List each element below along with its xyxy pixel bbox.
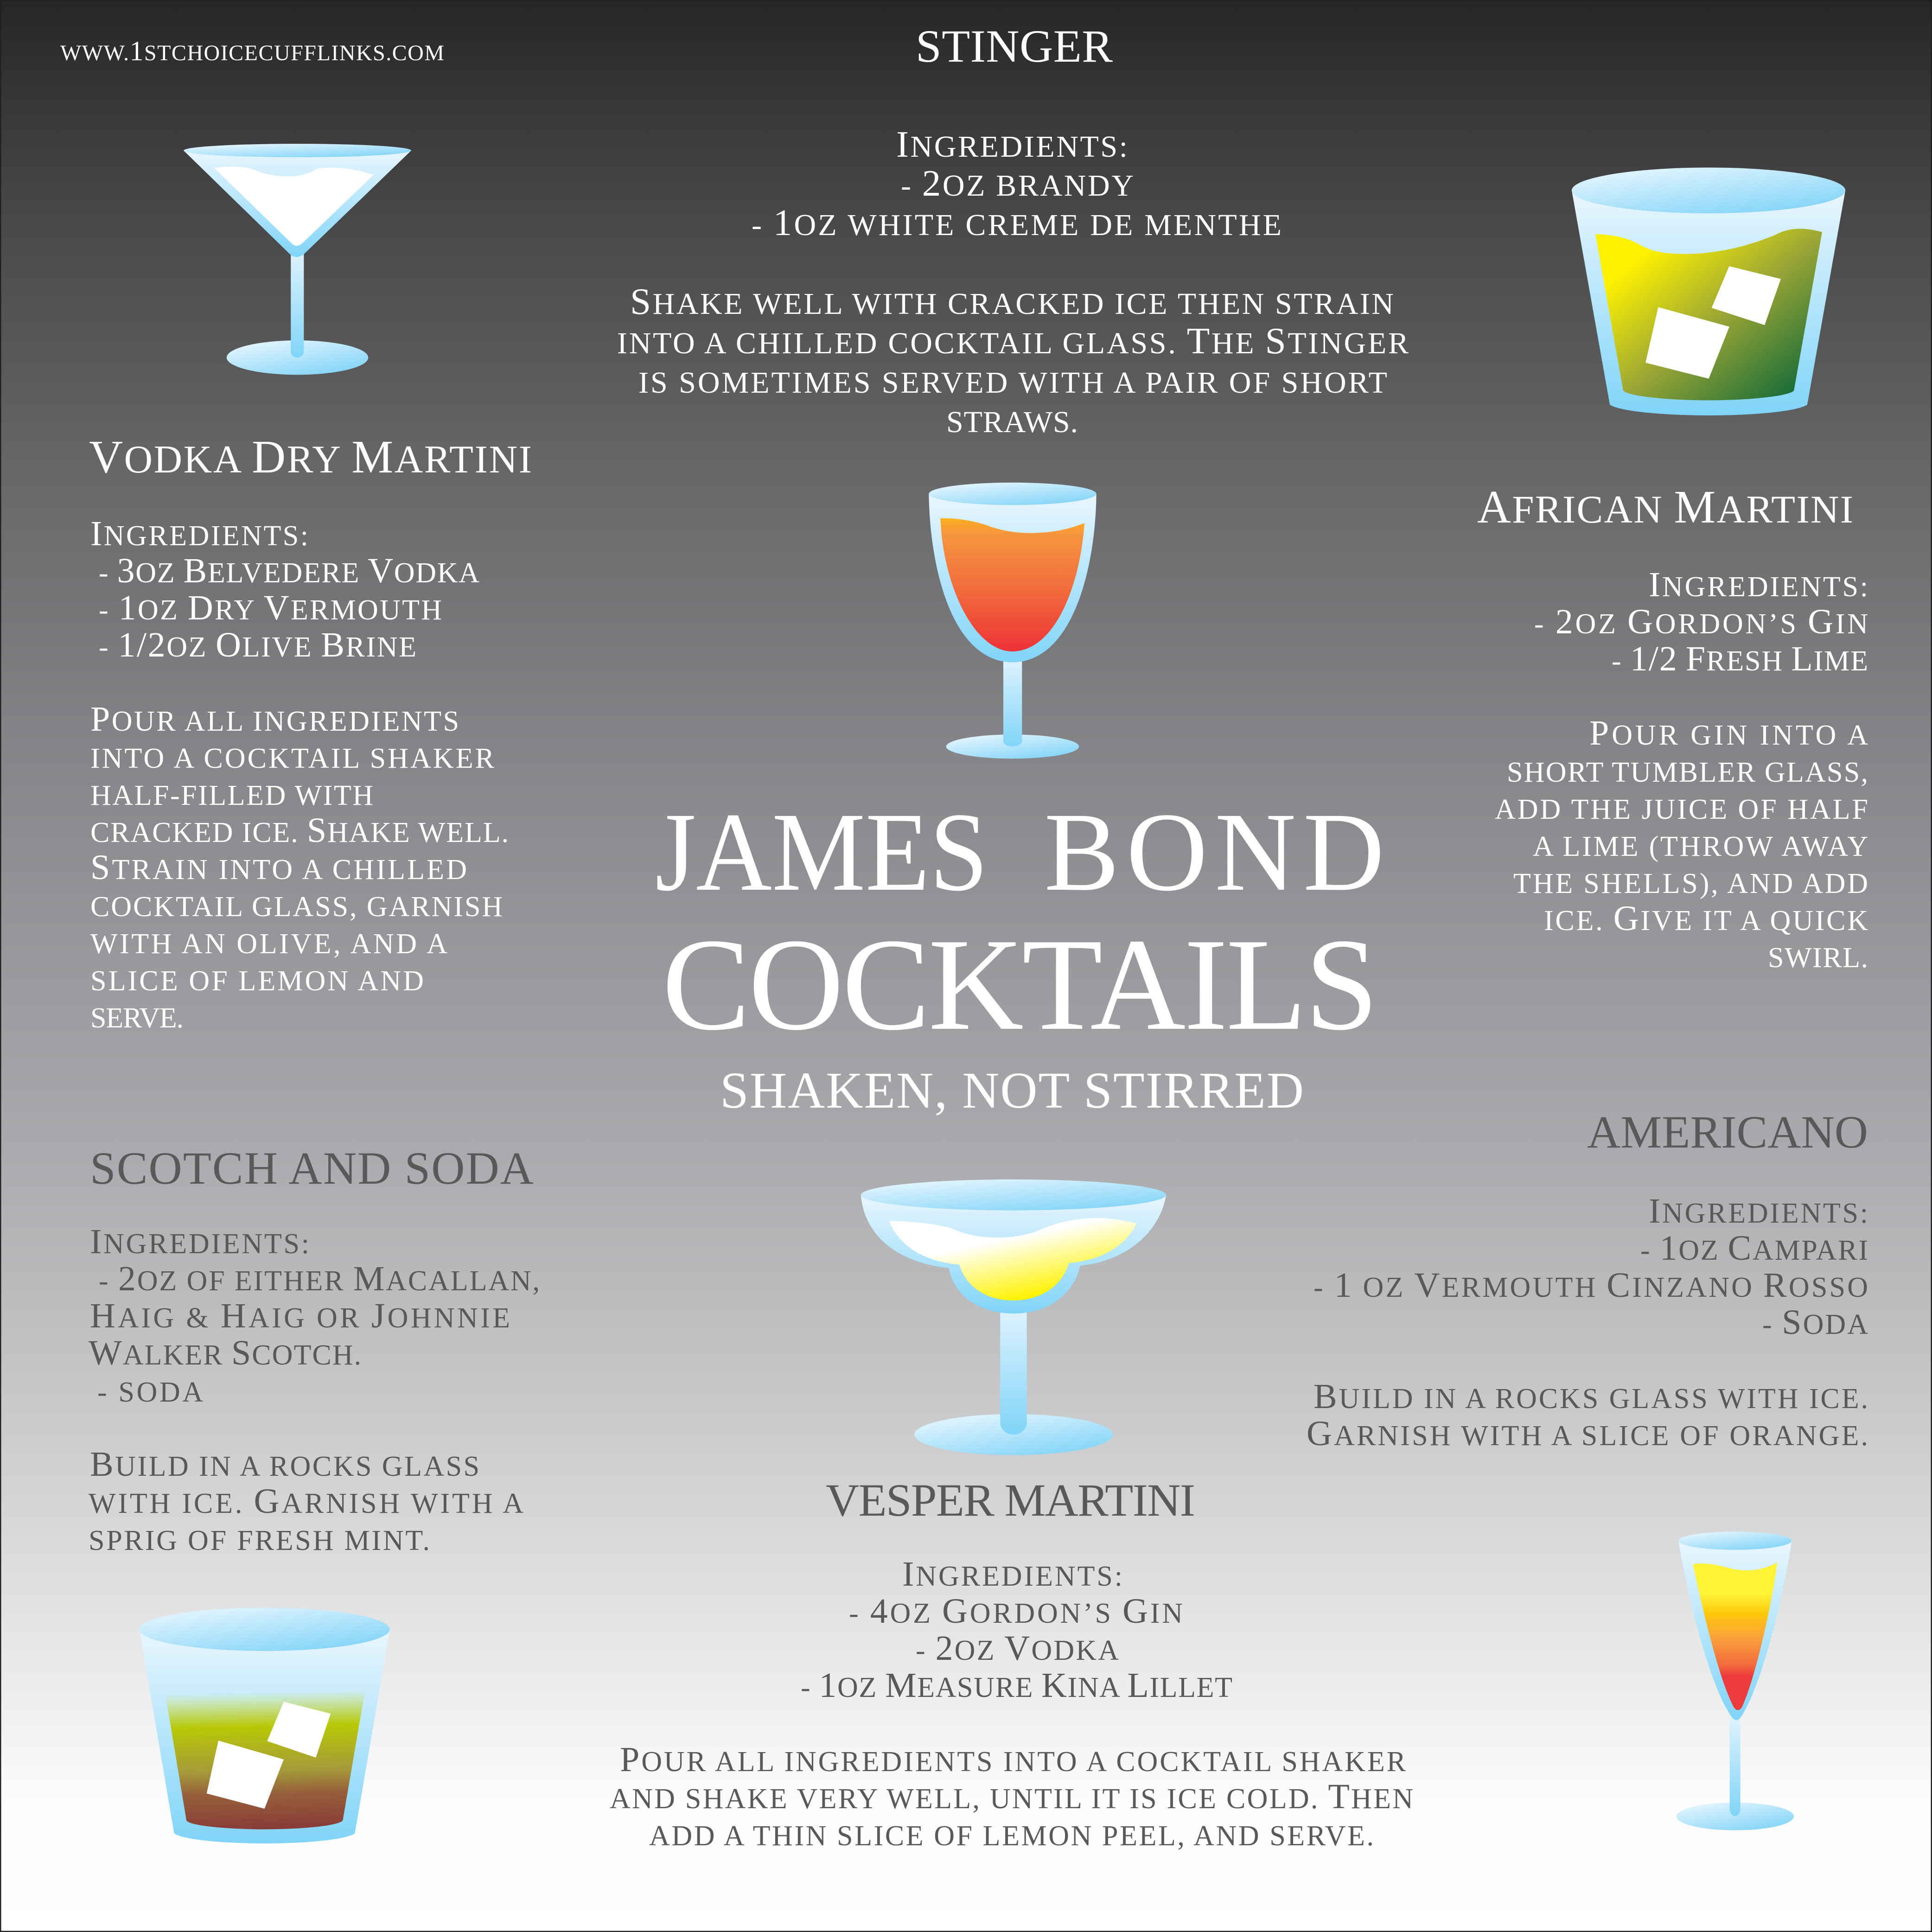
recipe: stinger: INTO A CHILLED COCKTAIL GLASS. THE STINGER <box>617 320 1409 362</box>
recipe: vodka dry martini: INTO A COCKTAIL SHAKER <box>90 743 495 774</box>
recipe: scotch and soda: HAIG & HAIG OR JOHNNIE <box>90 1296 510 1335</box>
recipe: americano: AMERICANO <box>1587 1106 1868 1158</box>
recipe: african martini: POUR GIN INTO A <box>1589 714 1868 752</box>
recipe: vodka dry martini: HALF-FILLED WITH <box>90 780 373 811</box>
recipe: vesper martini: VESPER MARTINI <box>826 1474 1195 1526</box>
title <box>655 789 1384 1119</box>
title: SHAKEN, NOT STIRRED <box>720 1062 1304 1119</box>
recipe: stinger: STRAWS. <box>946 405 1078 439</box>
recipe: vesper martini: INGREDIENTS: <box>902 1555 1122 1594</box>
recipe: african martini <box>1477 481 1868 974</box>
recipe: african martini: - 2OZ GORDON’S GIN <box>1534 602 1868 641</box>
recipe: vesper martini: AND SHAKE VERY WELL, UNTIL IT IS ICE COLD. THEN <box>610 1777 1413 1816</box>
recipe: stinger: SHAKE WELL WITH CRACKED ICE THEN STRAIN <box>630 281 1394 322</box>
recipe: scotch and soda: SCOTCH AND SODA <box>90 1142 534 1194</box>
recipe: vodka dry martini: - 3OZ BELVEDERE VODKA <box>99 551 479 590</box>
recipe: african martini: THE SHELLS), AND ADD <box>1513 868 1868 899</box>
recipe: vodka dry martini: INGREDIENTS: <box>90 514 308 553</box>
recipe: vesper martini: ADD A THIN SLICE OF LEMON PEEL, AND SERVE. <box>649 1820 1374 1852</box>
recipe: african martini: - 1/2 FRESH LIME <box>1612 639 1868 678</box>
recipe: african martini: SWIRL. <box>1768 942 1868 974</box>
recipe: vodka dry martini: POUR ALL INGREDIENTS <box>90 700 459 739</box>
recipe: scotch and soda: - SODA <box>97 1377 203 1408</box>
recipe: scotch and soda: WITH ICE. GARNISH WITH A <box>89 1482 523 1521</box>
icon: stinger glass <box>929 483 1097 759</box>
recipe: vodka dry martini: - 1/2OZ OLIVE BRINE <box>99 625 416 664</box>
recipe: scotch and soda: INGREDIENTS: <box>90 1222 309 1261</box>
recipe: african martini: A LIME (THROW AWAY <box>1533 831 1868 862</box>
recipe: african martini: ICE. GIVE IT A QUICK <box>1544 899 1868 938</box>
recipe: african martini: INGREDIENTS: <box>1649 565 1868 604</box>
recipe: americano <box>1307 1106 1868 1453</box>
recipe: african martini: SHORT TUMBLER GLASS, <box>1507 757 1868 788</box>
recipe: americano: - 1 OZ VERMOUTH CINZANO ROSSO <box>1314 1266 1868 1305</box>
recipe: americano: GARNISH WITH A SLICE OF ORANGE. <box>1307 1414 1868 1453</box>
recipe: scotch and soda: WALKER SCOTCH. <box>89 1333 361 1372</box>
recipe: vesper martini: POUR ALL INGREDIENTS INTO A COCKTAIL SHAKER <box>620 1740 1406 1779</box>
recipe: vesper martini: - 4OZ GORDON’S GIN <box>849 1592 1183 1631</box>
recipe: americano: INGREDIENTS: <box>1649 1192 1868 1231</box>
recipe: vodka dry martini: - 1OZ DRY VERMOUTH <box>99 588 442 627</box>
recipe: scotch and soda <box>89 1142 540 1556</box>
icon: vodka dry martini glass <box>184 144 411 375</box>
recipe: stinger: INGREDIENTS: <box>896 123 1128 165</box>
recipe: vodka dry martini: SERVE. <box>90 1002 184 1034</box>
recipe: scotch and soda: - 2OZ OF EITHER MACALLAN, <box>99 1259 540 1298</box>
icon: americano glass <box>1677 1531 1794 1830</box>
icon: vesper martini glass <box>861 1180 1166 1455</box>
icon: scotch and soda glass <box>139 1608 390 1843</box>
recipe: vodka dry martini: WITH AN OLIVE, AND A <box>90 928 447 960</box>
recipe: scotch and soda: SPRIG OF FRESH MINT. <box>89 1525 430 1556</box>
recipe: vodka dry martini <box>89 431 532 1034</box>
recipe: americano: - 1OZ CAMPARI <box>1640 1229 1868 1268</box>
title: JAMES <box>655 789 988 914</box>
recipe: vesper martini <box>610 1474 1413 1852</box>
icon: african martini glass <box>1572 167 1845 415</box>
recipe: stinger: - 2OZ BRANDY <box>901 162 1134 204</box>
recipe: vodka dry martini: CRACKED ICE. SHAKE WELL. <box>90 811 509 850</box>
recipe: vesper martini: - 1OZ MEASURE KINA LILLET <box>801 1666 1232 1705</box>
recipe: vodka dry martini: COCKTAIL GLASS, GARNISH <box>90 891 503 923</box>
recipe: scotch and soda: BUILD IN A ROCKS GLASS <box>90 1445 479 1484</box>
recipe: stinger: IS SOMETIMES SERVED WITH A PAIR OF SHORT <box>638 366 1387 400</box>
recipe: vodka dry martini: STRAIN INTO A CHILLED <box>90 848 467 887</box>
recipe: vesper martini: - 2OZ VODKA <box>916 1629 1119 1668</box>
recipe: americano: BUILD IN A ROCKS GLASS WITH ICE. <box>1314 1377 1868 1416</box>
recipe: stinger: - 1OZ WHITE CREME DE MENTHE <box>752 202 1282 243</box>
recipe: vodka dry martini: SLICE OF LEMON AND <box>90 965 424 997</box>
recipe: stinger: STINGER <box>916 20 1113 72</box>
title: COCKTAILS <box>662 911 1378 1058</box>
recipe: african martini: ADD THE JUICE OF HALF <box>1495 794 1868 825</box>
title: BOND <box>1044 789 1384 914</box>
recipe: americano: - SODA <box>1762 1303 1868 1342</box>
website url: WWW.1STCHOICECUFFLINKS.COM <box>60 36 444 66</box>
recipe: african martini: AFRICAN MARTINI <box>1477 481 1853 533</box>
recipe: vodka dry martini: VODKA DRY MARTINI <box>89 431 532 483</box>
recipe: stinger <box>617 20 1409 439</box>
